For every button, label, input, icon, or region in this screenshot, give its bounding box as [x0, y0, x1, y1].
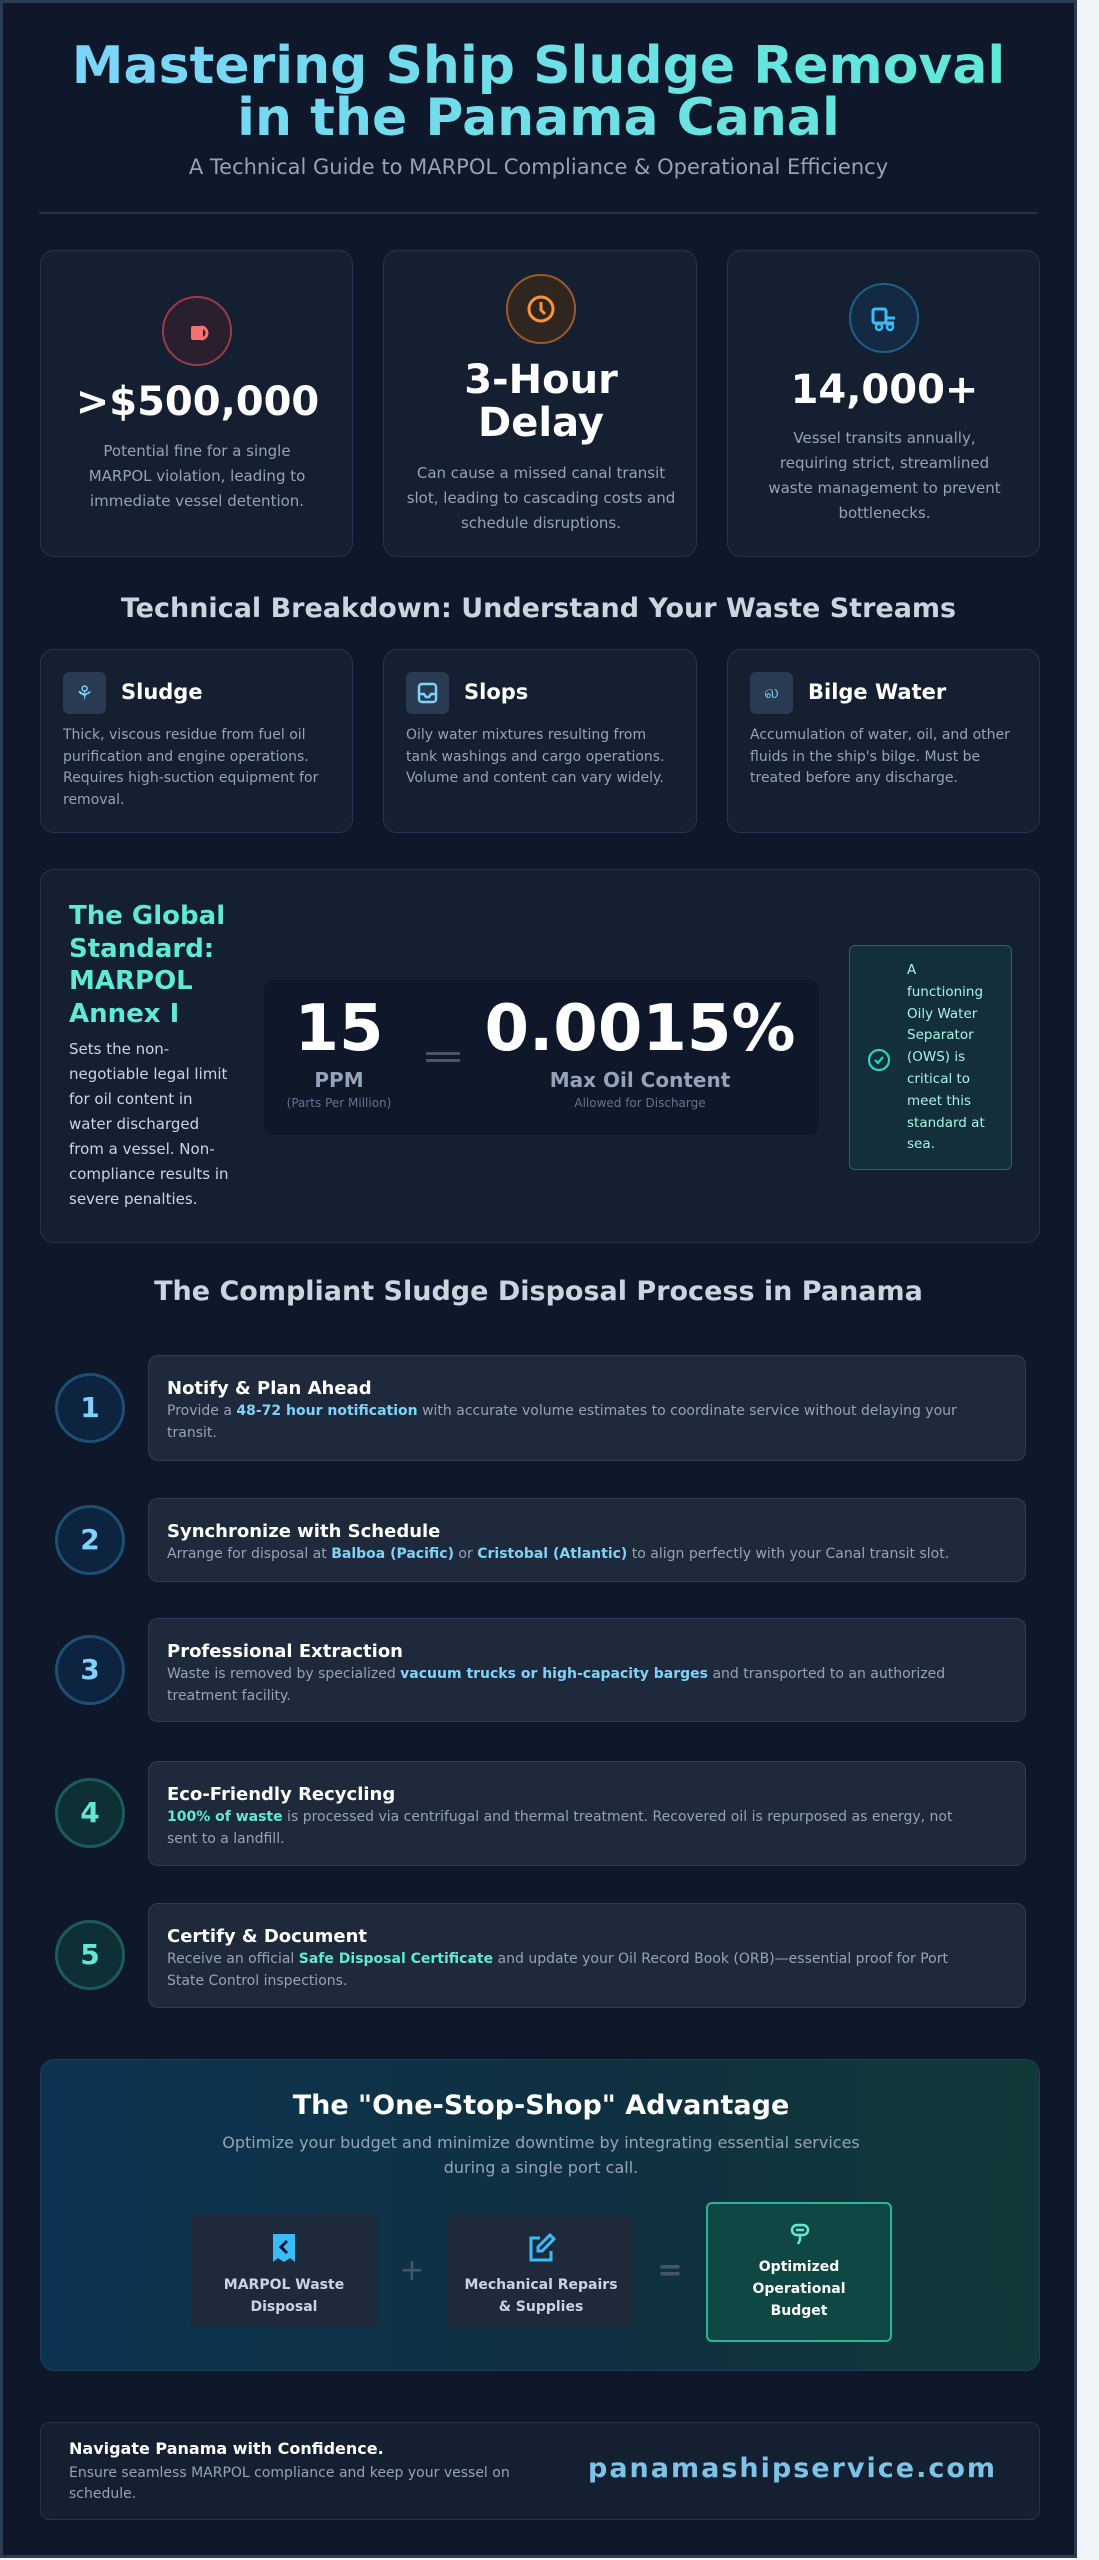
equals sign [426, 1052, 460, 1062]
box: optimized budget: Operational [752, 2281, 846, 2297]
icon: slops [406, 672, 449, 714]
stat card: fine [40, 250, 353, 557]
step card: Certify & Document [167, 1926, 367, 1947]
step card: Arrange for disposal at Balboa (Pacific) or Cristobal (Atlantic) to align perfectly with your Canal transit slot. [167, 1546, 949, 1562]
stat value: 14,000+ [791, 367, 978, 413]
stat box: 15 ppm: Allowed for Discharge [574, 1096, 706, 1110]
icon: bilge [750, 672, 793, 714]
text: Oily water mixtures resulting from tank washings and cargo operations. Volume and content can vary widely. [406, 727, 665, 786]
step card [148, 1498, 1026, 1582]
label: PPM: PPM [314, 1068, 364, 1092]
step card [148, 1355, 1026, 1461]
step 2 [55, 1498, 1026, 1582]
step 3 [55, 1618, 1026, 1722]
number circle [55, 1635, 125, 1705]
panel: sludge [40, 649, 353, 833]
icon: edit [530, 2233, 556, 2262]
title: Mastering Ship Sludge Removal [72, 36, 1005, 96]
icon: sludge: ⚘ [76, 681, 93, 705]
number circle: 5 [80, 1938, 100, 1971]
stat value: 3-Hour [464, 357, 618, 403]
footer text: Ensure seamless MARPOL compliance and keep your vessel on schedule. [69, 2465, 510, 2502]
heading: Slops [464, 680, 528, 704]
stat box: 15 ppm [264, 980, 819, 1135]
section heading: waste streams: Technical Breakdown: Understand Your Waste Streams [121, 593, 956, 624]
box: mechanical repairs: Mechanical Repairs [464, 2277, 618, 2293]
panel: bilge water [727, 649, 1040, 833]
step card [148, 1761, 1026, 1866]
stat card: transits [727, 250, 1040, 557]
number circle: 3 [80, 1653, 100, 1686]
number circle [55, 1778, 125, 1848]
stat description: Can cause a missed canal transit slot, leading to cascading costs and schedule disruptions. [407, 464, 675, 532]
section heading: process: The Compliant Sludge Disposal Process in Panama [154, 1276, 923, 1307]
step card: Synchronize with Schedule [167, 1521, 440, 1542]
icon: savings [790, 2224, 810, 2244]
icon: bilge: ல [764, 682, 779, 703]
footer heading: Navigate Panama with Confidence. [69, 2439, 384, 2458]
box: mechanical repairs [448, 2214, 634, 2328]
stat value [464, 357, 618, 446]
title: in the Panama Canal [237, 88, 840, 148]
step card: Professional Extraction [167, 1641, 403, 1662]
icon: truck [849, 283, 919, 353]
number circle [55, 1920, 125, 1990]
box: MARPOL waste disposal: Disposal [250, 2299, 317, 2315]
box: optimized budget: Optimized [759, 2259, 839, 2275]
heading: Bilge Water [808, 680, 946, 704]
step card [148, 1618, 1026, 1722]
step card: Provide a 48-72 hour notification with accurate volume estimates to coordinate service without delaying your transit. [167, 1403, 957, 1441]
panel: one-stop-shop [40, 2059, 1040, 2371]
icon: fine [162, 296, 232, 366]
panel: slops [383, 649, 697, 833]
equals sign: = [657, 2253, 683, 2288]
box: optimized budget [706, 2202, 892, 2342]
description: Sets the non-negotiable legal limit for oil content in water discharged from a vessel. Non-compliance results in severe penalties. [69, 1040, 229, 1208]
step card: 100% of waste is processed via centrifugal and thermal treatment. Recovered oil is repurposed as energy, not sent to a landfill. [167, 1809, 952, 1847]
step card: Notify & Plan Ahead [167, 1378, 372, 1399]
step card: Eco-Friendly Recycling [167, 1784, 395, 1805]
step card [148, 1903, 1026, 2008]
step card: Receive an official Safe Disposal Certificate and update your Oil Record Book (ORB)—essential proof for Port State Control inspections. [167, 1951, 948, 1989]
text: Thick, viscous residue from fuel oil purification and engine operations. Requires high-suction equipment for removal. [63, 727, 318, 808]
heading: The Global Standard: MARPOL Annex I [69, 901, 225, 1028]
step 5 [55, 1903, 1026, 2008]
icon: sludge [63, 672, 106, 714]
number circle: 2 [80, 1523, 100, 1556]
callout text: A functioning Oily Water Separator (OWS) is critical to meet this standard at sea. [907, 962, 985, 1152]
heading: The "One-Stop-Shop" Advantage [293, 2090, 789, 2121]
label: max oil: Max Oil Content [550, 1068, 730, 1092]
number circle [55, 1373, 125, 1443]
icon: clock [506, 274, 576, 344]
box: MARPOL waste disposal: MARPOL Waste [224, 2277, 344, 2293]
subtitle: A Technical Guide to MARPOL Compliance & Operational Efficiency [189, 155, 888, 179]
step 1 [55, 1355, 1026, 1461]
heading: Sludge [121, 680, 203, 704]
box: optimized budget: Budget [771, 2303, 827, 2319]
stat description: Potential fine for a single MARPOL violation, leading to immediate vessel detention. [89, 442, 305, 510]
title [0, 40, 1077, 144]
subtitle: Optimize your budget and minimize downtime by integrating essential services during a single port call. [222, 2133, 860, 2177]
step card: Waste is removed by specialized vacuum trucks or high-capacity barges and transported to an authorized treatment facility. [167, 1666, 945, 1704]
box: MARPOL waste disposal [191, 2214, 377, 2328]
number circle: 1 [80, 1391, 100, 1424]
stat value: Delay [478, 400, 604, 446]
stat box: 15 ppm: (Parts Per Million) [287, 1096, 391, 1110]
footer panel [40, 2422, 1040, 2520]
number circle [55, 1505, 125, 1575]
box: mechanical repairs: & Supplies [499, 2299, 583, 2315]
stat value: >$500,000 [76, 379, 319, 425]
panel: MARPOL standard [40, 869, 1040, 1243]
website url: panamashipservice.com [588, 2453, 997, 2484]
plus sign: + [399, 2253, 425, 2288]
number circle: 4 [80, 1796, 100, 1829]
stat card: delay [383, 250, 697, 557]
callout: OWS [849, 945, 1012, 1170]
value: percent: 0.0015% [484, 992, 796, 1066]
value: 15: 15 [294, 992, 384, 1066]
icon: check [868, 1048, 890, 1072]
stat description: Vessel transits annually, requiring strict, streamlined waste management to prevent bottlenecks. [768, 429, 1001, 522]
step 4 [55, 1761, 1026, 1866]
icon: receipt [273, 2234, 295, 2262]
text: Accumulation of water, oil, and other fluids in the ship's bilge. Must be treated before any discharge. [750, 727, 1010, 786]
